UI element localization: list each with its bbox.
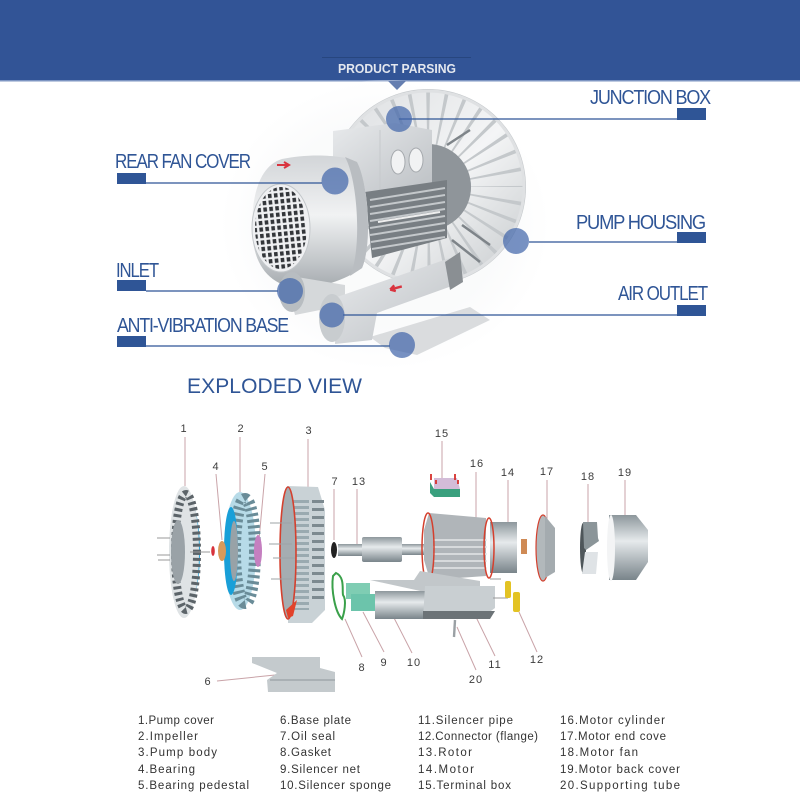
legend column 3: 14.Motor [418,764,474,776]
legend column 2: 9.Silencer net [280,764,361,776]
part 18 motor fan [580,522,599,574]
callout: inlet: INLET [116,260,159,282]
part numbers: 6 [204,676,212,688]
exploded diagram [157,423,648,692]
part numbers: 7 [331,476,339,488]
part 6 base plate [252,657,335,692]
callout: junction box [386,87,711,132]
callout: rear fan cover: REAR FAN COVER [115,151,251,173]
legend column 2: 6.Base plate [280,715,351,727]
header banner [0,0,800,90]
motor body [365,180,447,258]
legend column 1: 5.Bearing pedestal [138,780,249,792]
part numbers: 2 [237,423,245,435]
legend column 4: 17.Motor end cove [560,731,666,743]
callout: air outlet: AIR OUTLET [618,283,708,305]
legend column 2: 8.Gasket [280,747,332,759]
part numbers: 5 [261,461,269,473]
heading: product parsing: PRODUCT PARSING [338,62,456,76]
callout: air outlet [320,283,708,328]
part numbers: 15 [435,428,449,440]
legend column 4: 18.Motor fan [560,747,638,759]
part 3 pump body [269,486,325,623]
legend column 4 [560,715,680,792]
part numbers: 17 [540,466,554,478]
legend column 1 [138,715,249,792]
pump housing [330,89,526,285]
part 2 impeller [218,492,262,610]
legend column 3 [418,715,538,792]
part numbers: 4 [212,461,220,473]
part numbers: 18 [581,471,595,483]
callout: junction box: JUNCTION BOX [590,87,711,109]
part numbers: 19 [618,467,632,479]
legend column 1: 4.Bearing [138,764,195,776]
legend column 1: 3.Pump body [138,747,217,759]
legend column 4: 19.Motor back cover [560,764,680,776]
legend column 3: 13.Rotor [418,747,472,759]
legend column 2 [280,715,391,792]
leader lines [185,437,625,681]
part numbers [180,423,632,688]
part numbers: 12 [530,654,544,666]
part numbers: 1 [180,423,188,435]
callout: rear fan cover [115,151,348,194]
part numbers: 16 [470,458,484,470]
legend column 4: 16.Motor cylinder [560,715,665,727]
heading: exploded view: EXPLODED VIEW [187,375,362,398]
part 15 terminal box [430,474,460,497]
legend [138,715,680,792]
callout: anti-vibration base [117,315,415,358]
legend column 4: 20.Supporting tube [560,780,680,792]
part 16 motor [422,513,527,583]
part numbers: 14 [501,467,515,479]
part 9 silencer net [332,573,377,619]
part 17 motor end cover [536,515,555,581]
part 7 and 13 rotor [331,537,426,562]
part numbers: 20 [469,674,483,686]
callout: pump housing [503,212,706,254]
legend column 1: 2.Impeller [138,731,198,743]
callout: inlet [116,260,303,304]
part 19 motor back cover [607,515,648,581]
legend column 3: 12.Connector (flange) [418,731,538,743]
part 10 and 11 silencer [370,571,520,637]
part numbers: 10 [407,657,421,669]
rear fan cover [250,155,368,288]
part numbers: 3 [305,425,313,437]
legend column 2: 10.Silencer sponge [280,780,391,792]
silencer and outlet [319,252,463,344]
air inlet tube [279,272,345,315]
legend column 2: 7.Oil seal [280,731,335,743]
base plate [370,307,490,355]
blower photo [252,80,526,355]
part numbers: 11 [488,659,502,671]
part numbers: 13 [352,476,366,488]
legend column 1: 1.Pump cover [138,715,214,727]
callout: pump housing: PUMP HOUSING [576,212,706,234]
part numbers: 9 [380,657,388,669]
callout: anti-vibration base: ANTI-VIBRATION BASE [117,315,289,337]
terminal box [333,123,432,196]
part 1 pump cover [157,486,215,618]
part numbers: 8 [358,662,366,674]
legend column 3: 15.Terminal box [418,780,511,792]
legend column 3: 11.Silencer pipe [418,715,513,727]
